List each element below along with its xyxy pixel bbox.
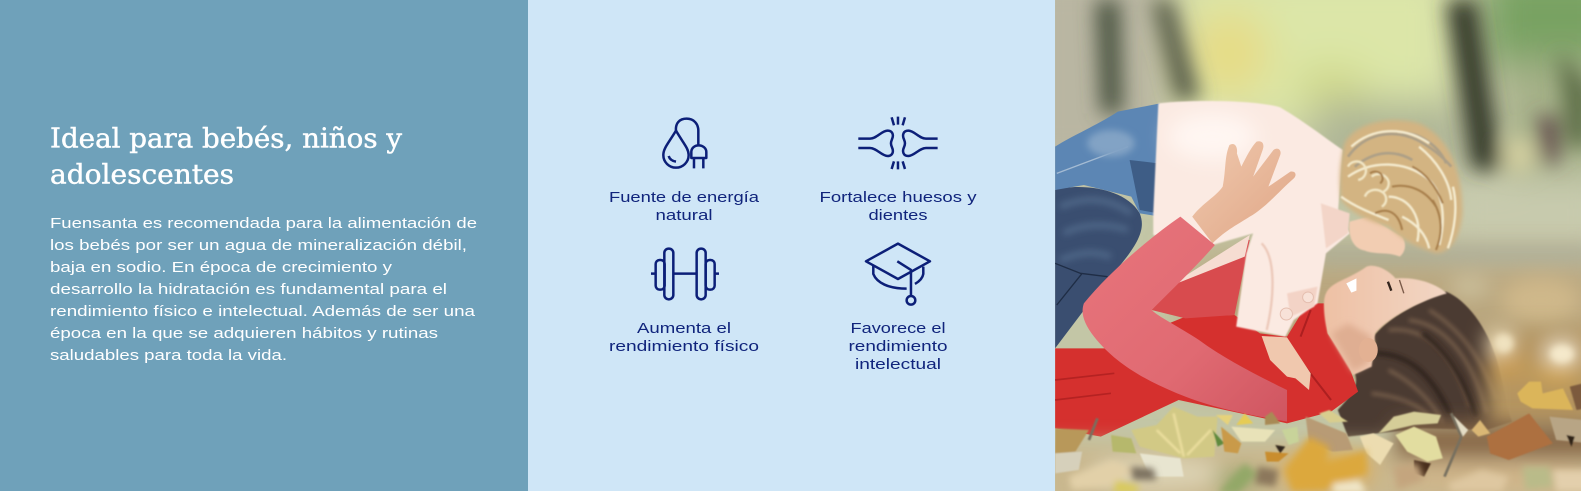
- body paragraph: [50, 215, 477, 364]
- label: physical performance: Aumenta el: [637, 321, 731, 337]
- blurred park background: [1016, 0, 1581, 387]
- child's pale jacket: [1153, 101, 1350, 337]
- label: intellectual performance: intelectual: [855, 357, 941, 373]
- label: bones and teeth: dientes: [868, 208, 928, 224]
- heading: Ideal para bebés, niños y: [50, 124, 403, 154]
- panel: intro text: [0, 0, 528, 491]
- photo: mother and child playing in autumn leaves: [1016, 0, 1581, 491]
- body paragraph: desarrollo la hidratación es fundamental para el: [50, 281, 447, 298]
- mother's hair: [1338, 292, 1512, 437]
- benefit: natural energy: [609, 119, 760, 224]
- label: bones and teeth: [820, 190, 977, 224]
- child's curly hair and face: [1340, 120, 1462, 257]
- icon: graduation cap: [866, 244, 930, 305]
- benefit: bones and teeth: [820, 117, 977, 224]
- body paragraph: saludables para toda la vida.: [50, 347, 287, 364]
- icon: bone joint: [858, 117, 938, 169]
- right-side leaf bed: [1487, 330, 1581, 430]
- mother's hand: [1192, 141, 1296, 243]
- mother's inner arm: [1152, 239, 1250, 318]
- body paragraph: época en la que se adquieren hábitos y rutinas: [50, 325, 438, 342]
- label: physical performance: rendimiento físico: [609, 339, 759, 355]
- body paragraph: rendimiento físico e intelectual. Además de ser una: [50, 303, 476, 320]
- label: natural energy: Fuente de energía: [609, 190, 760, 206]
- body paragraph: los bebés por ser un agua de mineralización débil,: [50, 237, 467, 254]
- label: intellectual performance: Favorece el: [850, 321, 946, 337]
- autumn leaves foreground: [1038, 330, 1581, 491]
- child's denim trousers: [1055, 103, 1160, 348]
- benefit: intellectual performance: [848, 244, 948, 373]
- body paragraph: baja en sodio. En época de crecimiento y: [50, 259, 393, 276]
- icon: dumbbell: [651, 249, 719, 299]
- heading: [50, 124, 403, 190]
- label: natural energy: natural: [656, 208, 712, 224]
- label: natural energy: [609, 190, 760, 224]
- benefit: physical performance: [609, 249, 759, 355]
- mother's red vest: [1055, 303, 1358, 437]
- label: physical performance: [609, 321, 759, 355]
- mother's face: [1324, 266, 1447, 375]
- front leaf pile: [1038, 380, 1581, 491]
- label: bones and teeth: Fortalece huesos y: [820, 190, 977, 206]
- mother's pink sleeve: [1083, 217, 1287, 422]
- heading: adolescentes: [50, 160, 234, 190]
- panel: benefits: [528, 0, 1055, 491]
- label: intellectual performance: rendimiento: [848, 339, 948, 355]
- body paragraph: Fuensanta es recomendada para la alimentación de: [50, 215, 477, 232]
- child's hand on chest: [1262, 336, 1311, 390]
- label: intellectual performance: [848, 321, 948, 373]
- icon: water drop with plug: [663, 119, 706, 168]
